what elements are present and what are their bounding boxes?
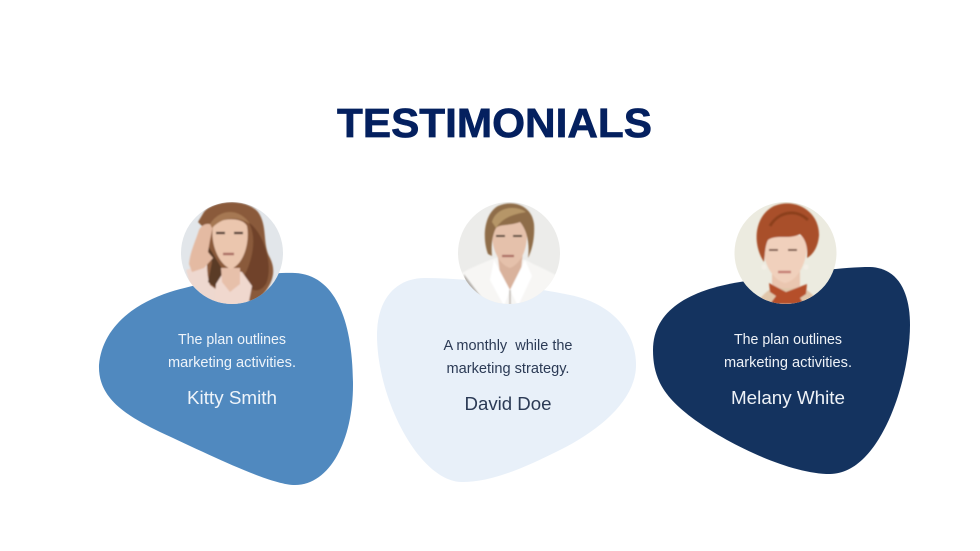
quote text: The plan outlines bbox=[178, 332, 286, 348]
name: David Doe bbox=[464, 393, 552, 414]
quote text bbox=[168, 332, 296, 371]
portrait: Melany White bbox=[734, 201, 838, 306]
portrait: Kitty Smith bbox=[180, 201, 284, 306]
panel: Melany White testimonial bbox=[653, 201, 910, 474]
quote text: marketing activities. bbox=[168, 355, 296, 371]
quote text bbox=[724, 332, 852, 371]
quote text bbox=[444, 338, 572, 377]
quote text: marketing strategy. bbox=[446, 361, 570, 377]
name: Melany White bbox=[731, 387, 845, 408]
quote text: The plan outlines bbox=[734, 332, 842, 348]
panel: Kitty Smith testimonial bbox=[99, 201, 353, 485]
blob: navy card bbox=[653, 267, 910, 474]
blob: medium blue card bbox=[99, 273, 353, 485]
quote text: marketing activities. bbox=[724, 355, 852, 371]
quote text: A monthly while the bbox=[444, 338, 572, 354]
title: TESTIMONIALS bbox=[337, 100, 652, 146]
portrait: David Doe bbox=[457, 201, 561, 306]
blob: pale blue card bbox=[377, 278, 636, 482]
name: Kitty Smith bbox=[187, 387, 277, 408]
panel: David Doe testimonial bbox=[377, 201, 636, 482]
